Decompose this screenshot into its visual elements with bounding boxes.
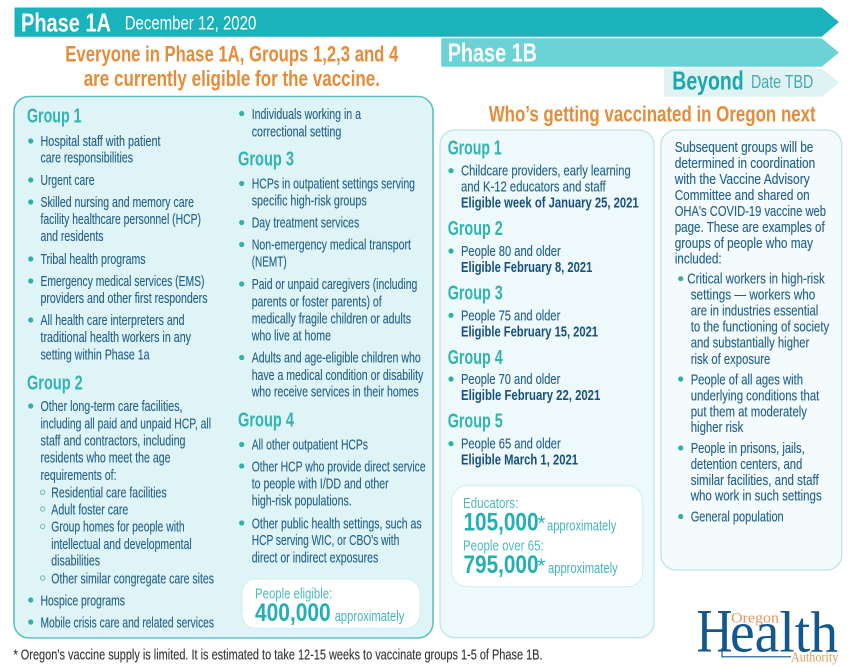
list: Group 1 items: Skilled nursing and memory care bbox=[40, 195, 194, 211]
list: Group 1 items: Emergency medical services (EMS) bbox=[40, 274, 204, 290]
banner: Phase 1B bbox=[441, 37, 839, 67]
list: Group 2 continued: correctional setting bbox=[252, 125, 341, 141]
item: 1B Group 1 bbox=[448, 164, 639, 212]
callout: educators and people over 65 bbox=[452, 486, 643, 587]
list: example groups: are in industries essential bbox=[691, 304, 818, 320]
list: Group 2 items: Mobile crisis care and related services bbox=[40, 616, 214, 632]
text block: subsequent groups intro: Subsequent groups will be bbox=[675, 140, 813, 156]
item: 1B Group 5 bbox=[448, 437, 578, 469]
list: Group 3 items bbox=[239, 177, 424, 401]
item: 1B Group 1: Childcare providers, early learning bbox=[461, 164, 631, 180]
item: 1B Group 2: People 80 and older bbox=[461, 244, 561, 260]
list: Group 1 items: Urgent care bbox=[40, 173, 94, 189]
list: Group 3 items: who live at home bbox=[251, 328, 331, 344]
heading: 1B Group 3: Group 3 bbox=[448, 282, 503, 304]
list: Group 2 items: Hospice programs bbox=[40, 593, 125, 609]
list: Group 2 items: Group homes for people with bbox=[51, 520, 185, 536]
list: Group 1 items: care responsibilities bbox=[40, 150, 133, 166]
list: Group 2 items bbox=[28, 399, 214, 632]
item: 1B Group 2: Eligible February 8, 2021 bbox=[461, 260, 592, 276]
list: Group 1 items: and residents bbox=[40, 229, 104, 245]
list: Group 2 continued: Individuals working in a bbox=[252, 107, 362, 123]
callout: people eligible: 400,000 bbox=[255, 599, 331, 627]
text block: subsequent groups intro: groups of people who may bbox=[675, 236, 814, 252]
callout: educators and people over 65: * bbox=[538, 513, 546, 535]
heading: Group 4: Group 4 bbox=[238, 410, 295, 432]
list: Group 2 items: Other similar congregate care sites bbox=[51, 572, 214, 588]
list: Group 1 items: setting within Phase 1a bbox=[40, 347, 150, 363]
list: example groups: higher risk bbox=[691, 420, 744, 436]
callout: educators and people over 65: approximately bbox=[547, 518, 617, 535]
callout: educators and people over 65: 795,000 bbox=[464, 551, 538, 579]
item: 1B Group 4: Eligible February 22, 2021 bbox=[461, 388, 600, 404]
list: Group 3 items: Day treatment services bbox=[252, 216, 359, 232]
heading: Group 2: Group 2 bbox=[27, 372, 83, 394]
list: Group 3 items: specific high-risk groups bbox=[252, 193, 367, 209]
list: example groups: settings — workers who bbox=[691, 288, 815, 304]
list: Group 4 items: HCP serving WIC, or CBO's with bbox=[252, 533, 399, 549]
callout: educators and people over 65: Educators: bbox=[463, 495, 518, 512]
list: example groups: General population bbox=[691, 510, 784, 526]
logo: Oregon Health Authority: H bbox=[696, 599, 732, 666]
callout: educators and people over 65: 105,000 bbox=[464, 509, 538, 537]
list: Group 4 items bbox=[239, 438, 426, 566]
list: Group 3 items: have a medical condition or disability bbox=[252, 368, 424, 384]
list: Group 1 items: providers and other first responders bbox=[40, 291, 208, 307]
text block: subsequent groups intro: determined in coordination bbox=[675, 156, 815, 172]
item: 1B Group 4: People 70 and older bbox=[461, 372, 560, 388]
banner: Beyond: Beyond bbox=[672, 65, 744, 95]
banner: Beyond: Date TBD bbox=[751, 71, 813, 92]
item: 1B Group 4 bbox=[448, 372, 600, 404]
list: Group 2 items: residents who meet the age bbox=[40, 451, 170, 467]
item: 1B Group 1: Eligible week of January 25, 2021 bbox=[461, 196, 639, 212]
item: 1B Group 5: Eligible March 1, 2021 bbox=[461, 453, 578, 469]
list: Group 4 items: to people with I/DD and other bbox=[252, 477, 389, 493]
list: example groups: People of all ages with bbox=[691, 372, 803, 388]
list: Group 4 items: high-risk populations. bbox=[252, 494, 352, 510]
banner: Beyond bbox=[664, 65, 839, 97]
logo: Oregon Health Authority: Authority bbox=[791, 651, 838, 666]
list: Group 3 items: Paid or unpaid caregivers (including bbox=[252, 277, 417, 293]
list: Group 4 items: direct or indirect exposures bbox=[252, 550, 378, 566]
list: Group 2 items: Residential care facilities bbox=[51, 485, 167, 501]
list: Group 2 items: staff and contractors, including bbox=[40, 434, 186, 450]
panel: Phase 1A groups bbox=[14, 96, 433, 638]
panel: Phase 1B groups bbox=[440, 130, 654, 638]
list: example groups: risk of exposure bbox=[691, 352, 770, 368]
list: Group 3 items: HCPs in outpatient settings serving bbox=[252, 177, 415, 193]
heading: Phase 1A eligibility bbox=[65, 42, 399, 91]
text block: subsequent groups intro bbox=[674, 140, 826, 268]
list: Group 2 items: Adult foster care bbox=[51, 503, 128, 519]
heading: Phase 1A eligibility: Everyone in Phase 1A, Groups 1,2,3 and 4 bbox=[65, 42, 399, 67]
logo: Oregon Health Authority: ealth bbox=[730, 600, 838, 665]
heading: 1B Group 4: Group 4 bbox=[448, 347, 503, 369]
list: Group 2 items: Other long-term care facilities, bbox=[40, 399, 182, 415]
heading: Group 1: Group 1 bbox=[27, 106, 82, 128]
list: example groups: and substantially higher bbox=[691, 336, 809, 352]
heading: Phase 1A eligibility: are currently eligible for the vaccine. bbox=[84, 66, 380, 91]
heading: 1B Group 1: Group 1 bbox=[448, 138, 502, 160]
panel: Beyond groups bbox=[661, 130, 842, 570]
list: example groups: put them at moderately bbox=[691, 404, 808, 420]
list: Group 2 items: requirements of: bbox=[40, 468, 116, 484]
heading: 1B Group 2: Group 2 bbox=[448, 218, 503, 240]
item: 1B Group 3 bbox=[448, 308, 598, 340]
callout: people eligible: approximately bbox=[335, 608, 405, 625]
heading: Group 3: Group 3 bbox=[238, 149, 294, 171]
list: Group 3 items: Non-emergency medical transport bbox=[252, 238, 411, 254]
callout: people eligible: People eligible: bbox=[255, 585, 332, 602]
footnote: * Oregon’s vaccine supply is limited. It is estimated to take 12-15 weeks to vaccinate groups 1-5 of Phase 1B. bbox=[14, 647, 542, 663]
item: 1B Group 5: People 65 and older bbox=[461, 437, 561, 453]
list: Group 1 items bbox=[28, 134, 207, 363]
text block: subsequent groups intro: Committee and shared on bbox=[675, 188, 810, 204]
list: Group 4 items: Other HCP who provide direct service bbox=[252, 459, 426, 475]
logo: Oregon Health Authority: Oregon bbox=[731, 610, 780, 626]
banner: Phase 1A: December 12, 2020 bbox=[125, 14, 256, 35]
list: example groups bbox=[678, 272, 830, 526]
callout: people eligible bbox=[242, 579, 420, 628]
list: example groups: detention centers, and bbox=[691, 457, 802, 473]
list: Group 2 items: intellectual and developmental bbox=[51, 537, 192, 553]
list: Group 4 items: Other public health settings, such as bbox=[252, 516, 422, 532]
heading: 1B Group 5: Group 5 bbox=[448, 410, 503, 432]
item: 1B Group 2 bbox=[448, 244, 592, 276]
list: Group 1 items: facility healthcare personnel (HCP) bbox=[40, 212, 201, 228]
list: Group 3 items: Adults and age-eligible children who bbox=[252, 351, 421, 367]
list: Group 1 items: Tribal health programs bbox=[40, 252, 146, 268]
item: 1B Group 3: Eligible February 15, 2021 bbox=[461, 324, 598, 340]
banner: Phase 1B: Phase 1B bbox=[448, 37, 537, 67]
list: Group 4 items: All other outpatient HCPs bbox=[252, 438, 368, 454]
list: Group 3 items: medically fragile children or adults bbox=[252, 311, 411, 327]
item: 1B Group 3: People 75 and older bbox=[461, 308, 560, 324]
list: Group 1 items: Hospital staff with patient bbox=[40, 134, 160, 150]
list: example groups: People in prisons, jails, bbox=[691, 441, 805, 457]
callout: educators and people over 65: approximately bbox=[548, 560, 618, 577]
list: example groups: similar facilities, and staff bbox=[691, 473, 819, 489]
item: 1B Group 1: and K-12 educators and staff bbox=[461, 180, 606, 196]
list: Group 3 items: who receive services in their homes bbox=[251, 385, 419, 401]
list: Group 2 items: disabilities bbox=[51, 554, 100, 570]
list: Group 1 items: All health care interpreters and bbox=[40, 313, 184, 329]
list: Group 1 items: traditional health workers in any bbox=[40, 330, 192, 346]
list: Group 3 items: (NEMT) bbox=[252, 255, 287, 271]
banner: Phase 1A: Phase 1A bbox=[21, 7, 111, 37]
list: Group 2 items: including all paid and unpaid HCP, all bbox=[40, 416, 211, 432]
callout: educators and people over 65: * bbox=[538, 555, 546, 577]
text block: subsequent groups intro: with the Vaccine Advisory bbox=[674, 172, 810, 188]
list: Group 2 continued bbox=[239, 107, 362, 141]
banner: Phase 1A bbox=[14, 7, 839, 37]
callout: educators and people over 65: People over 65: bbox=[463, 538, 544, 555]
list: Group 3 items: parents or foster parents) of bbox=[252, 294, 382, 310]
text block: subsequent groups intro: included: bbox=[675, 252, 722, 268]
